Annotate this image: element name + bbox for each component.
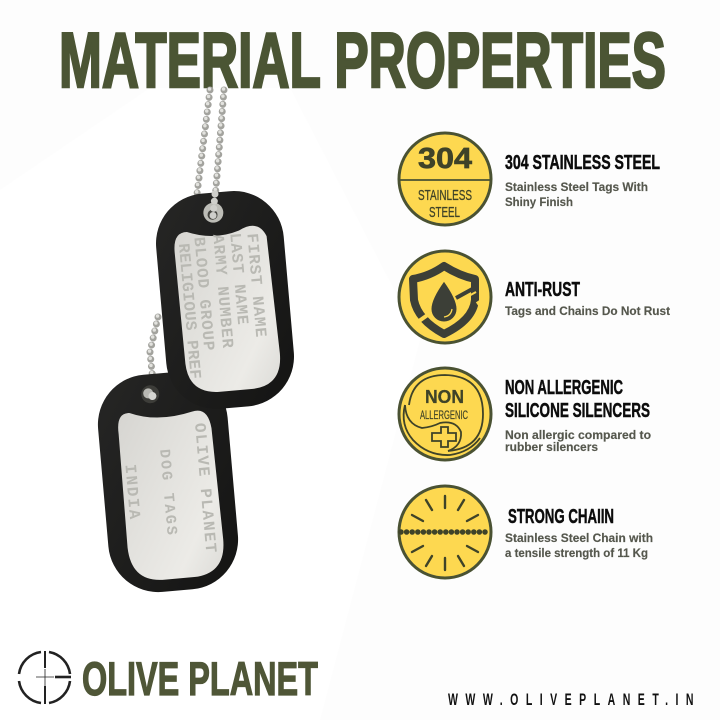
icon: 304 badge bbox=[399, 133, 491, 225]
wordmark: OLIVE PLANET bbox=[82, 652, 318, 705]
description bbox=[505, 182, 648, 209]
icon: crosshair bbox=[19, 651, 71, 704]
description: Stainless Steel Chain with bbox=[505, 533, 653, 545]
feature: anti-rust bbox=[399, 251, 670, 343]
upper tag: RELIGIOUS PREF bbox=[174, 243, 204, 380]
logo: Olive Planet bbox=[19, 651, 318, 705]
icon: non allergenic badge bbox=[399, 368, 491, 460]
upper tag: ARMY NUMBER bbox=[208, 234, 236, 349]
heading: ANTI-RUST bbox=[505, 278, 580, 301]
icon: 304 badge: STEEL bbox=[429, 204, 460, 221]
chain beads through upper hole bbox=[213, 194, 215, 216]
lower tag bbox=[94, 368, 242, 596]
description: Shiny Finish bbox=[505, 197, 573, 209]
feature: 304 stainless steel bbox=[399, 133, 660, 225]
description: Tags and Chains Do Not Rust bbox=[505, 306, 670, 318]
icon: shield with drop bbox=[399, 251, 491, 343]
icon: 304 badge: STAINLESS bbox=[418, 187, 472, 204]
feature: strong chain bbox=[399, 486, 653, 578]
stamped text: India: INDIA bbox=[120, 464, 143, 520]
upper tag: LAST NAME bbox=[225, 232, 251, 325]
upper chain bbox=[196, 89, 224, 212]
icon: 304 badge: 304 bbox=[418, 143, 472, 175]
icon: chain with burst bbox=[399, 486, 491, 578]
heading bbox=[505, 376, 650, 422]
upper tag: BLOOD GROUP bbox=[189, 236, 217, 351]
heading: SILICONE SILENCERS bbox=[505, 399, 650, 422]
description: Non allergic compared to bbox=[505, 430, 651, 442]
description bbox=[505, 533, 653, 560]
feature: non allergenic bbox=[399, 368, 651, 460]
description bbox=[505, 430, 651, 454]
heading: NON ALLERGENIC bbox=[505, 376, 623, 399]
upper tag bbox=[152, 187, 298, 413]
icon: non allergenic badge: ALLERGENIC bbox=[420, 410, 468, 422]
description: Stainless Steel Tags With bbox=[505, 182, 648, 194]
stamped text: Olive Planet: OLIVE PLANET bbox=[190, 422, 219, 554]
stamped text: Dog Tags: DOG TAGS bbox=[155, 449, 180, 536]
heading: STRONG CHAIIN bbox=[508, 505, 614, 528]
website url: WWW.OLIVEPLANET.IN bbox=[448, 689, 694, 709]
description: a tensile strength of 11 Kg bbox=[505, 548, 648, 560]
dog tags photo bbox=[94, 89, 298, 596]
icon: non allergenic badge: NON bbox=[425, 387, 464, 407]
description: rubber silencers bbox=[505, 442, 598, 454]
lower chain bbox=[150, 316, 158, 392]
stamped text lines: FIRST NAME bbox=[242, 233, 269, 338]
